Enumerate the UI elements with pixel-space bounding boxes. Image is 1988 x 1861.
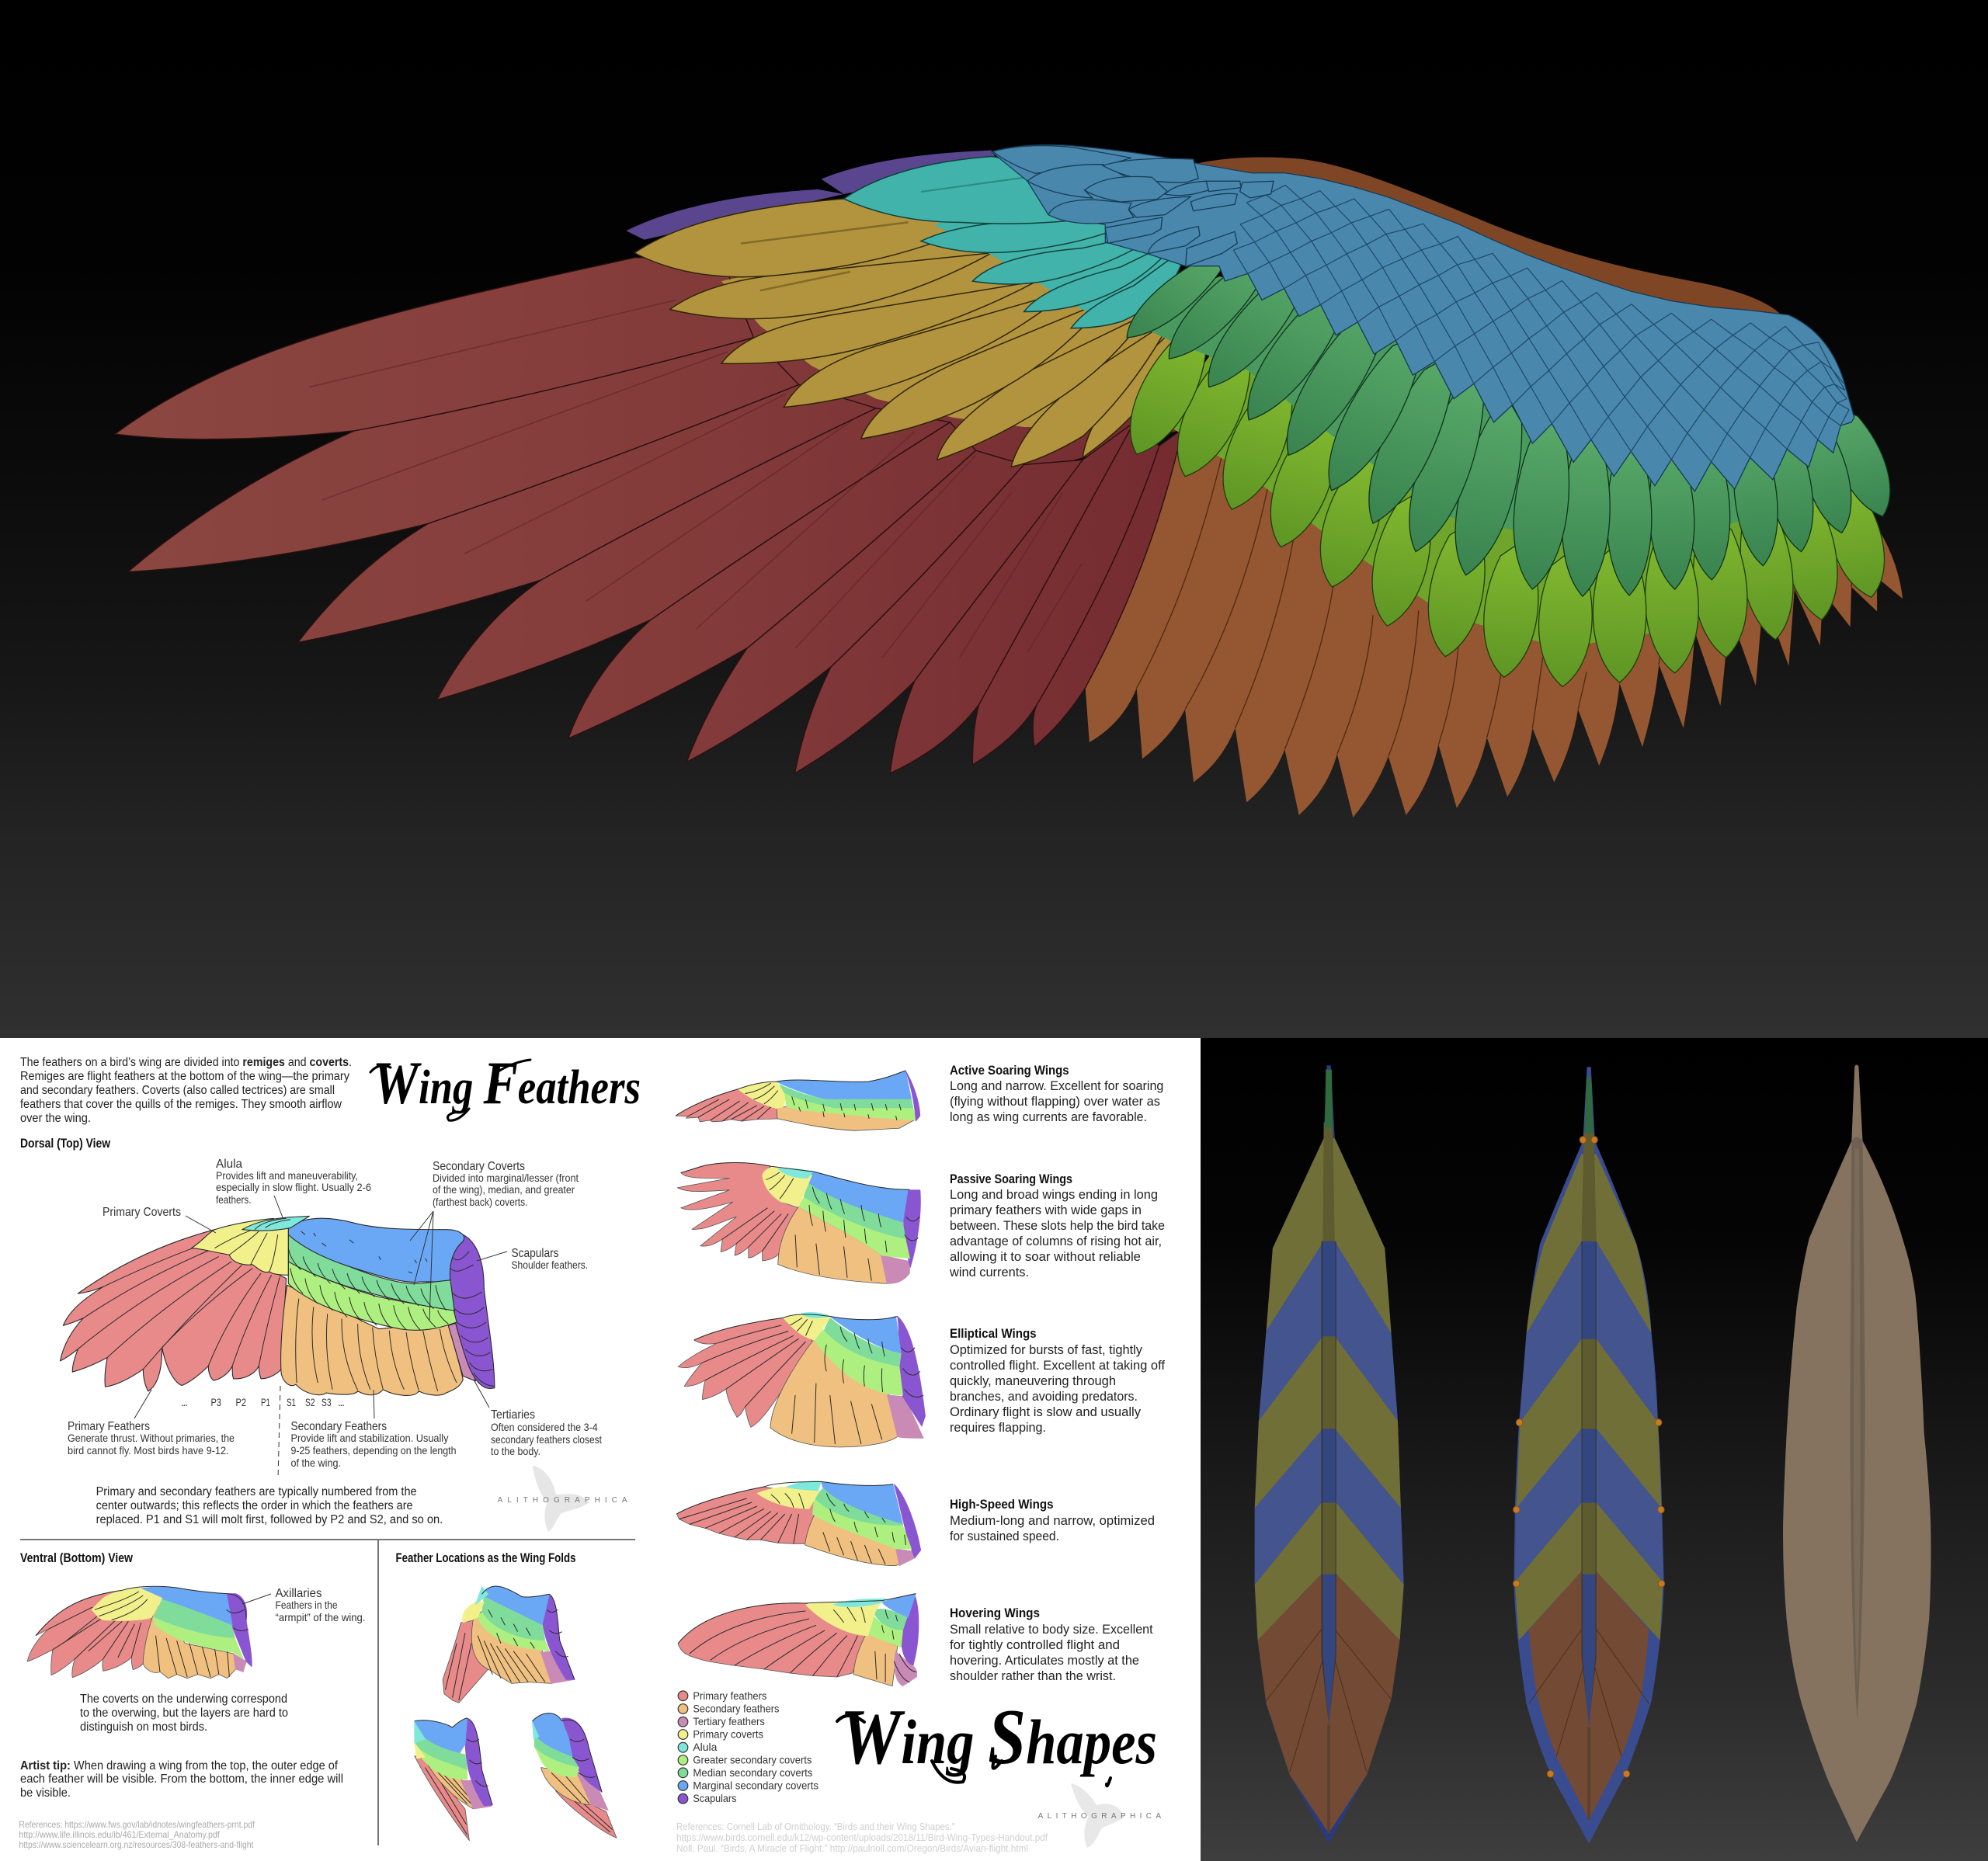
text: passive soaring: wind currents. [949, 1265, 1029, 1279]
section: wing shapes [676, 1064, 1165, 1854]
text: passive soaring: Passive Soaring Wings [950, 1172, 1072, 1186]
legend: Tertiary feathers [693, 1715, 765, 1727]
intro line 5: over the wing. [20, 1112, 91, 1125]
text: passive soaring [949, 1172, 1165, 1279]
gold primary coverts [634, 199, 1185, 467]
heading: folding: Feather Locations as the Wing Folds [396, 1551, 576, 1565]
watermark: Alithographica bird 2 [1038, 1783, 1161, 1848]
legend: Primary coverts [693, 1728, 763, 1741]
numbering note: Primary and secondary feathers are typically numbered from the [96, 1485, 417, 1498]
large blue scales near the wrist [992, 146, 1274, 266]
text: high-speed: for sustained speed. [950, 1529, 1059, 1543]
diagram: ventral wing [27, 1586, 252, 1679]
legend [678, 1689, 818, 1804]
label: secondary feathers [290, 1420, 457, 1469]
label: scapulars: Shoulder feathers. [511, 1259, 588, 1271]
numbering note: center outwards; this reflects the order in which the feathers are [96, 1499, 413, 1512]
label: secondary feathers: Provide lift and stabilization. Usually [290, 1432, 449, 1444]
text: passive soaring: advantage of columns of rising hot air, [950, 1234, 1162, 1248]
diagram: folded wing lower right [533, 1713, 617, 1838]
text: hovering: Small relative to body size. Excellent [950, 1622, 1153, 1637]
dividers [20, 1540, 635, 1845]
intro line 4: feathers that cover the quills of the remiges. They smooth airflow [20, 1098, 342, 1111]
label: secondary feathers: 9-25 feathers, depending on the length [290, 1444, 457, 1457]
feather numbering: P3 [211, 1396, 221, 1408]
legend: Secondary feathers [693, 1702, 779, 1714]
text: hovering: Hovering Wings [950, 1606, 1040, 1620]
references: References: Cornell Lab of Ornithology. “Birds and their Wing Shapes.” [676, 1821, 955, 1832]
wing: high-speed [676, 1481, 921, 1566]
text: passive soaring: Long and broad wings ending in long [950, 1187, 1158, 1202]
text: passive soaring: allowing it to soar without reliable [950, 1249, 1141, 1264]
heading: dorsal view: Dorsal (Top) View [20, 1137, 110, 1151]
wing: passive soaring [677, 1162, 920, 1283]
references: https://www.birds.cornell.edu/k12/wp-content/uploads/2018/11/Bird-Wing-Types-Handout.pdf [676, 1832, 1048, 1843]
maroon primary feathers [115, 258, 1185, 773]
feather numbering [181, 1396, 345, 1408]
label: primary feathers [68, 1420, 235, 1457]
legend: Greater secondary coverts [693, 1753, 812, 1766]
text: hovering: shoulder rather than the wrist. [950, 1668, 1116, 1683]
label: scapulars [511, 1247, 588, 1271]
artist tip [20, 1759, 343, 1800]
watermark: Alithographica bird [498, 1466, 627, 1532]
label: primary feathers: Generate thrust. Without primaries, the [68, 1432, 235, 1444]
wing: elliptical [678, 1313, 925, 1447]
purple underlayer feathers [626, 151, 998, 240]
text: elliptical: branches, and avoiding predators. [950, 1389, 1138, 1404]
feather: final tan sculpt [1783, 1065, 1931, 1842]
label: scapulars: Scapulars [511, 1247, 559, 1260]
label: secondary coverts [433, 1160, 579, 1208]
text: active soaring: Active Soaring Wings [950, 1064, 1069, 1078]
label: axillaries [275, 1587, 365, 1623]
text: hovering [950, 1606, 1153, 1683]
references: http://www.life.illinois.edu/ib/461/External_Anatomy.pdf [19, 1829, 220, 1840]
feather numbering: ... [181, 1396, 188, 1408]
legend: Marginal secondary coverts [693, 1779, 818, 1792]
panel: dark feather process panel [1201, 1038, 1988, 1861]
wing: hovering [678, 1594, 919, 1686]
note: underwing coverts [80, 1693, 288, 1734]
feather: mid-process with control points [1513, 1067, 1665, 1844]
blue marginal covert scales [992, 144, 1854, 491]
title: Wing Feathers: Wing Feathers [373, 1049, 641, 1116]
control points [1513, 1137, 1665, 1777]
label: alula: feathers. [216, 1193, 252, 1206]
label: tertiaries: to the body. [491, 1445, 540, 1457]
note: underwing coverts: to the overwing, but the layers are hard to [80, 1706, 288, 1720]
text: active soaring: Long and narrow. Excellent for soaring [950, 1078, 1163, 1093]
label: primary feathers: Primary Feathers [68, 1420, 150, 1433]
wing: active soaring [676, 1071, 920, 1130]
label: alula: especially in slow flight. Usually 2-6 [216, 1181, 371, 1193]
artist tip: be visible. [20, 1786, 71, 1800]
label: axillaries: “armpit” of the wing. [275, 1611, 365, 1623]
brown leading edge band [1197, 158, 1780, 324]
label: secondary feathers: of the wing. [290, 1457, 341, 1469]
panel: feather 3D process [1255, 1065, 1931, 1844]
references: Noll, Paul. “Birds, A Miracle of Flight.” http://paulnoll.com/Oregon/Birds/Avian-flight.html [676, 1843, 1028, 1854]
label: secondary coverts: Secondary Coverts [433, 1160, 525, 1173]
leader lines [134, 1196, 507, 1479]
text: elliptical: Ordinary flight is slow and usually [950, 1404, 1141, 1419]
text: high-speed: Medium-long and narrow, optimized [950, 1513, 1155, 1528]
diagram: dorsal wing [61, 1216, 495, 1395]
references [19, 1819, 255, 1850]
label: axillaries: Feathers in the [275, 1599, 338, 1611]
label: primary coverts: Primary Coverts [103, 1206, 181, 1219]
references: References: https://www.fws.gov/lab/idnotes/wingfeathers-prnt.pdf [19, 1819, 255, 1830]
text: elliptical [950, 1327, 1165, 1435]
green median coverts [1114, 246, 1904, 597]
light green greater coverts [1112, 321, 1896, 687]
note: underwing coverts: distinguish on most birds. [80, 1720, 207, 1734]
panel: 3D wing render background [0, 0, 1988, 1038]
feather numbering: P2 [236, 1396, 246, 1408]
label: tertiaries: Often considered the 3-4 [491, 1421, 598, 1433]
label: secondary feathers: Secondary Feathers [290, 1420, 387, 1433]
text: high-speed: High-Speed Wings [950, 1498, 1053, 1512]
feather numbering: P1 [261, 1396, 270, 1408]
references [676, 1821, 1048, 1854]
text: elliptical: Optimized for bursts of fast, tightly [950, 1342, 1142, 1357]
panel: white wing feathers and shapes sheet [0, 1038, 1201, 1861]
numbering note [96, 1485, 443, 1526]
label: alula: Provides lift and maneuverability, [216, 1169, 358, 1182]
watermark: Alithographica bird: ALITHOGRAPHICA [498, 1496, 627, 1505]
text: active soaring: (flying without flapping) over water as [950, 1094, 1160, 1109]
label: tertiaries: Tertiaries [491, 1408, 535, 1422]
intro line 3: and secondary feathers. Coverts (also called tectrices) are small [20, 1084, 335, 1097]
label: tertiaries: secondary feathers closest [491, 1433, 602, 1446]
watermark: Alithographica bird 2: ALITHOGRAPHICA [1038, 1812, 1161, 1821]
title: Wing Shapes: Wing Shapes [840, 1693, 1157, 1781]
text: active soaring: long as wing currents are favorable. [950, 1109, 1147, 1124]
numbering note: replaced. P1 and S1 will molt first, followed by P2 and S2, and so on. [96, 1513, 443, 1526]
feather numbering: S3 [321, 1396, 332, 1408]
label: tertiaries [491, 1408, 602, 1457]
label: axillaries: Axillaries [275, 1587, 321, 1600]
label: alula [216, 1158, 371, 1206]
text: active soaring [950, 1064, 1163, 1124]
text: elliptical: controlled flight. Excellent at taking off [950, 1358, 1165, 1373]
label: secondary coverts: (farthest back) coverts. [433, 1196, 528, 1208]
label: alula: Alula [216, 1158, 242, 1171]
label: primary feathers: bird cannot fly. Most birds have 9-12. [68, 1444, 229, 1457]
artist tip: Artist tip: When drawing a wing from the top, the outer edge of [20, 1759, 339, 1772]
text: hovering: hovering. Articulates mostly at the [950, 1653, 1139, 1668]
text: elliptical: quickly, maneuvering through [950, 1373, 1116, 1388]
legend: Median secondary coverts [693, 1766, 812, 1779]
leader: axillaries [242, 1594, 271, 1604]
text: elliptical: requires flapping. [950, 1420, 1046, 1435]
diagram: folded wing top [443, 1586, 575, 1703]
text: hovering: for tightly controlled flight and [950, 1637, 1120, 1652]
intro line 2: Remiges are flight feathers at the bottom of the wing—the primary [20, 1070, 349, 1083]
3D wing render [115, 144, 1904, 818]
legend: Scapulars [693, 1792, 736, 1804]
heading: ventral view: Ventral (Bottom) View [20, 1551, 133, 1565]
note: underwing coverts: The coverts on the underwing correspond [80, 1693, 287, 1706]
feather: polygon blockout [1255, 1065, 1404, 1844]
diagram: folded wing lower left [415, 1718, 492, 1841]
orange secondary feathers [1086, 352, 1903, 818]
label: secondary coverts: of the wing), median, and greater [433, 1183, 575, 1196]
section: wing feathers [19, 1049, 641, 1850]
legend: Alula [693, 1741, 718, 1753]
feather numbering: S1 [287, 1396, 296, 1408]
text: elliptical: Elliptical Wings [950, 1327, 1037, 1341]
feather numbering: S2 [305, 1396, 315, 1408]
references: https://www.sciencelearn.org.nz/resources/308-feathers-and-flight [19, 1839, 254, 1850]
teal alula feathers [844, 157, 1185, 328]
feather numbering: ... [338, 1396, 345, 1408]
text: passive soaring: between. These slots help the bird take [950, 1218, 1165, 1233]
text: passive soaring: primary feathers with wide gaps in [950, 1203, 1142, 1217]
label: secondary coverts: Divided into marginal/lesser (front [433, 1172, 579, 1184]
text: high-speed [950, 1498, 1155, 1543]
legend: Primary feathers [693, 1689, 766, 1702]
intro paragraph: The feathers on a bird’s wing are divided into remiges and coverts. [20, 1056, 352, 1069]
artist tip: each feather will be visible. From the bottom, the inner edge will [20, 1772, 343, 1786]
